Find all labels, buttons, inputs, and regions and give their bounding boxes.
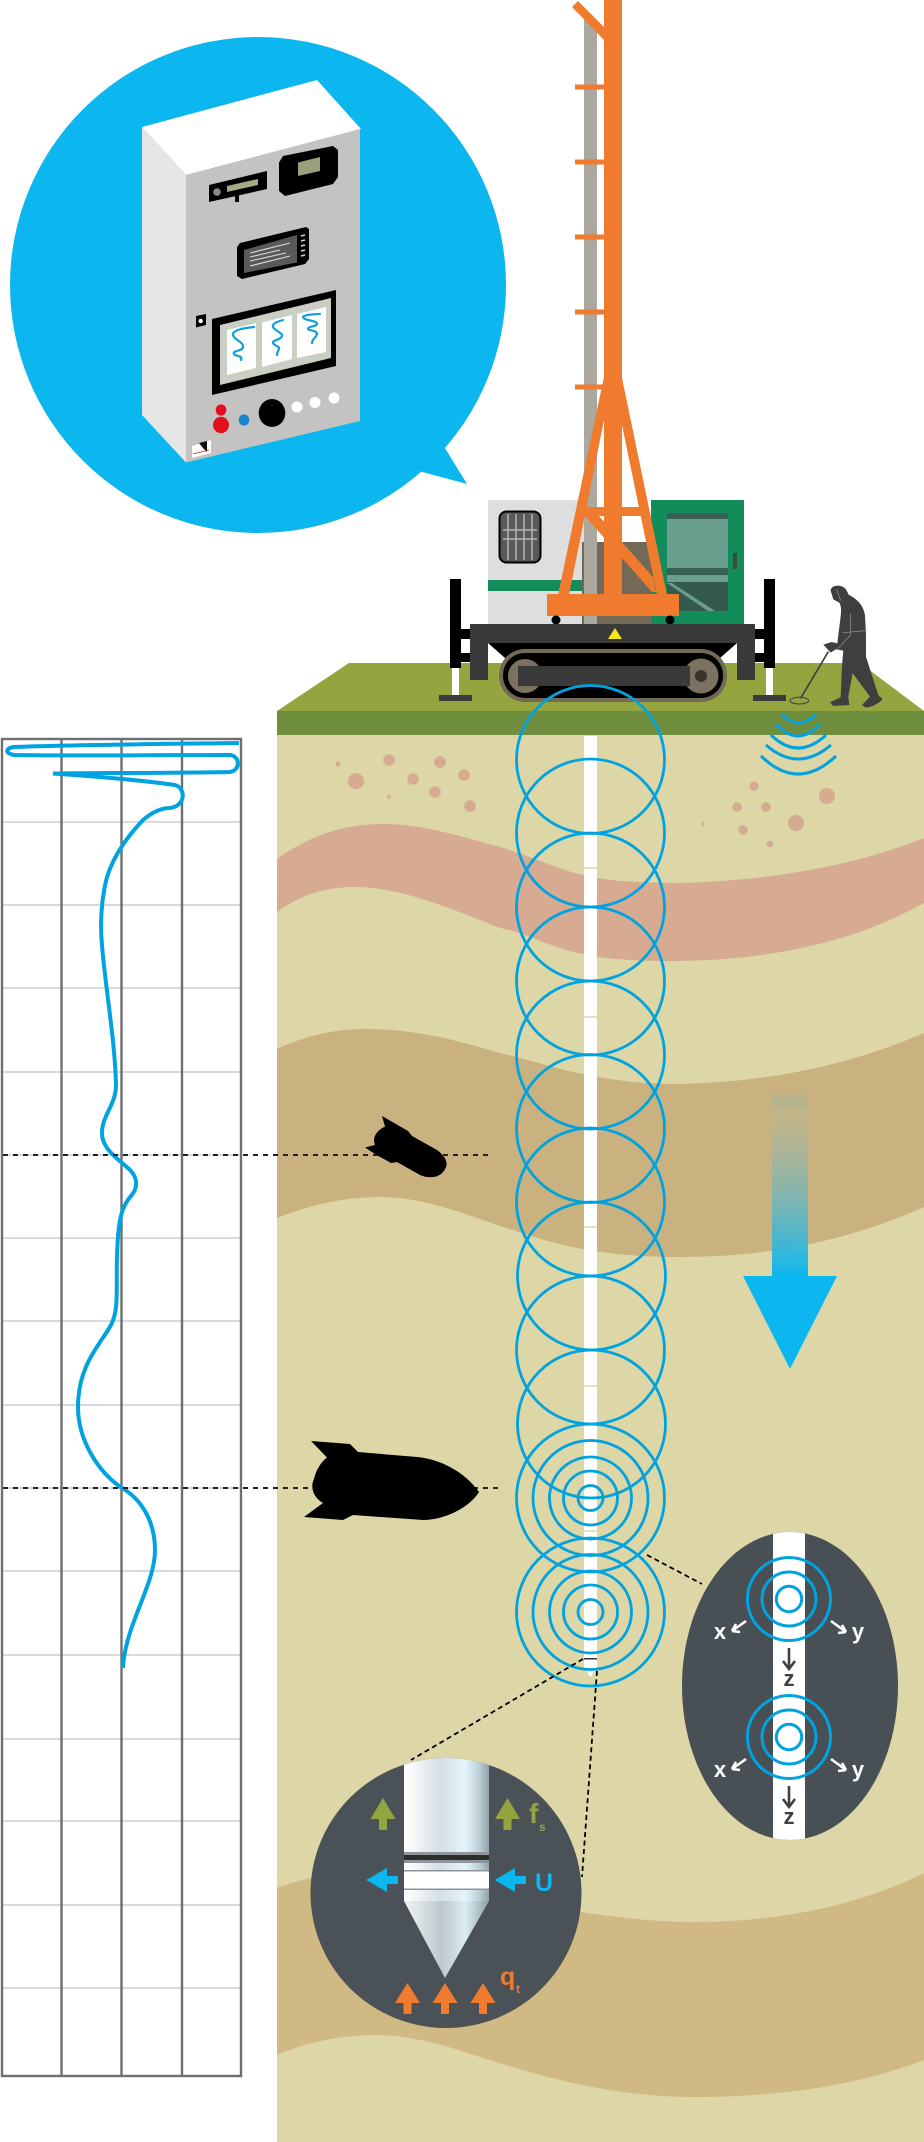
drilling rig <box>439 0 786 702</box>
lower y axis: y <box>852 1757 865 1782</box>
sleeve friction arrows and label: s <box>539 1820 546 1834</box>
cone resistance arrows and label: t <box>516 1982 520 1996</box>
lower sensor rings <box>748 1696 830 1778</box>
lower x axis: x <box>714 1757 727 1782</box>
pink soil layer <box>277 824 924 961</box>
small unexploded bomb <box>365 1116 447 1177</box>
crawler track <box>499 649 727 702</box>
ground surface <box>277 663 924 735</box>
lower z axis <box>783 1786 795 1829</box>
deep sand layer <box>277 1870 924 2097</box>
horizontal gridlines <box>3 822 241 1988</box>
pivot points <box>552 616 674 624</box>
white cabin <box>488 500 584 624</box>
detector signal waves <box>761 714 836 774</box>
green operator cab <box>651 500 744 624</box>
soil particles left <box>336 754 476 812</box>
depth marker line: large bomb <box>3 1487 500 1489</box>
engine housing <box>582 542 652 624</box>
detail view: accelerometers <box>682 1532 898 1840</box>
text display <box>237 227 309 279</box>
cone resistance arrows and label: q <box>500 1963 515 1991</box>
chart frame and columns <box>2 739 241 2076</box>
push rod <box>584 20 597 624</box>
pore pressure arrows and label: U <box>535 1869 553 1897</box>
lower y axis <box>831 1757 865 1782</box>
upper z axis <box>783 1648 795 1691</box>
seismic wave circles <box>516 686 666 1686</box>
speech bubble <box>10 37 506 533</box>
brown soil layer <box>277 1029 924 1257</box>
measurement curve <box>7 743 239 1668</box>
small display unit <box>209 171 267 202</box>
borehole <box>584 736 597 1677</box>
measurement chart <box>2 739 241 2076</box>
person with metal detector <box>790 586 883 708</box>
large unexploded bomb <box>304 1441 479 1520</box>
control buttons <box>213 392 340 433</box>
cabinet logo label <box>192 440 211 458</box>
upper y axis <box>831 1619 865 1644</box>
lower x axis <box>714 1757 746 1782</box>
pore pressure arrows and label <box>366 1868 553 1897</box>
sleeve friction arrows and label: f <box>529 1798 539 1829</box>
right outrigger <box>753 579 786 701</box>
upper x axis <box>714 1619 746 1644</box>
indicator square <box>196 314 206 328</box>
soil particles right <box>701 781 835 847</box>
chassis <box>470 624 755 680</box>
cone penetrometer <box>404 1750 489 1978</box>
detail view: cone tip <box>310 1750 582 2028</box>
control cabinet <box>142 80 361 462</box>
left outrigger <box>439 579 472 701</box>
upper sensor rings <box>748 1558 830 1640</box>
soil block <box>277 735 924 2142</box>
upper x axis: x <box>714 1619 727 1644</box>
black meter <box>279 146 338 196</box>
direction arrow <box>743 1090 837 1369</box>
sleeve friction arrows and label <box>370 1798 546 1834</box>
upper y axis: y <box>852 1619 865 1644</box>
cone resistance arrows and label <box>395 1963 520 2014</box>
upper z axis: z <box>784 1666 794 1691</box>
lower z axis: z <box>784 1804 794 1829</box>
depth marker line: small bomb <box>3 1154 488 1156</box>
leader lines to detail views <box>411 1555 702 1877</box>
monitor with three traces <box>212 290 336 395</box>
orange mast <box>547 0 679 616</box>
